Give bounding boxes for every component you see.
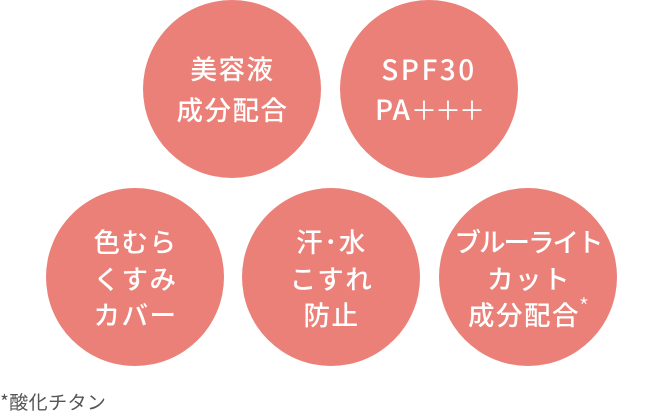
asterisk: * bbox=[579, 288, 589, 323]
badge: blue light cut ingredients: 成分配合 bbox=[468, 294, 580, 333]
badge: sweat, water and rub resistance bbox=[242, 188, 420, 366]
badge: color unevenness and dullness cover: くすみ bbox=[94, 258, 178, 297]
badge: color unevenness and dullness cover: 色むら bbox=[94, 221, 178, 260]
badge: blue light cut ingredients: ブルーライト bbox=[454, 221, 602, 260]
badge: serum ingredients: 成分配合 bbox=[176, 89, 288, 128]
badge: sweat, water and rub resistance: 汗･水 bbox=[296, 221, 367, 260]
badge: serum ingredients bbox=[143, 0, 321, 178]
badge: SPF30 PA+++: SPF30 bbox=[381, 49, 477, 89]
badge: sweat, water and rub resistance: 防止 bbox=[304, 294, 360, 333]
badge: color unevenness and dullness cover: カバー bbox=[94, 294, 178, 333]
badge: serum ingredients: 美容液 bbox=[190, 48, 274, 87]
badge: sweat, water and rub resistance: こすれ bbox=[290, 258, 373, 297]
badge: blue light cut ingredients bbox=[439, 188, 617, 366]
badge: SPF30 PA+++ bbox=[340, 0, 518, 178]
badge: SPF30 PA+++: PA＋＋＋ bbox=[375, 89, 483, 129]
badge: blue light cut ingredients: カット bbox=[487, 258, 571, 297]
badge: color unevenness and dullness cover bbox=[46, 188, 224, 366]
